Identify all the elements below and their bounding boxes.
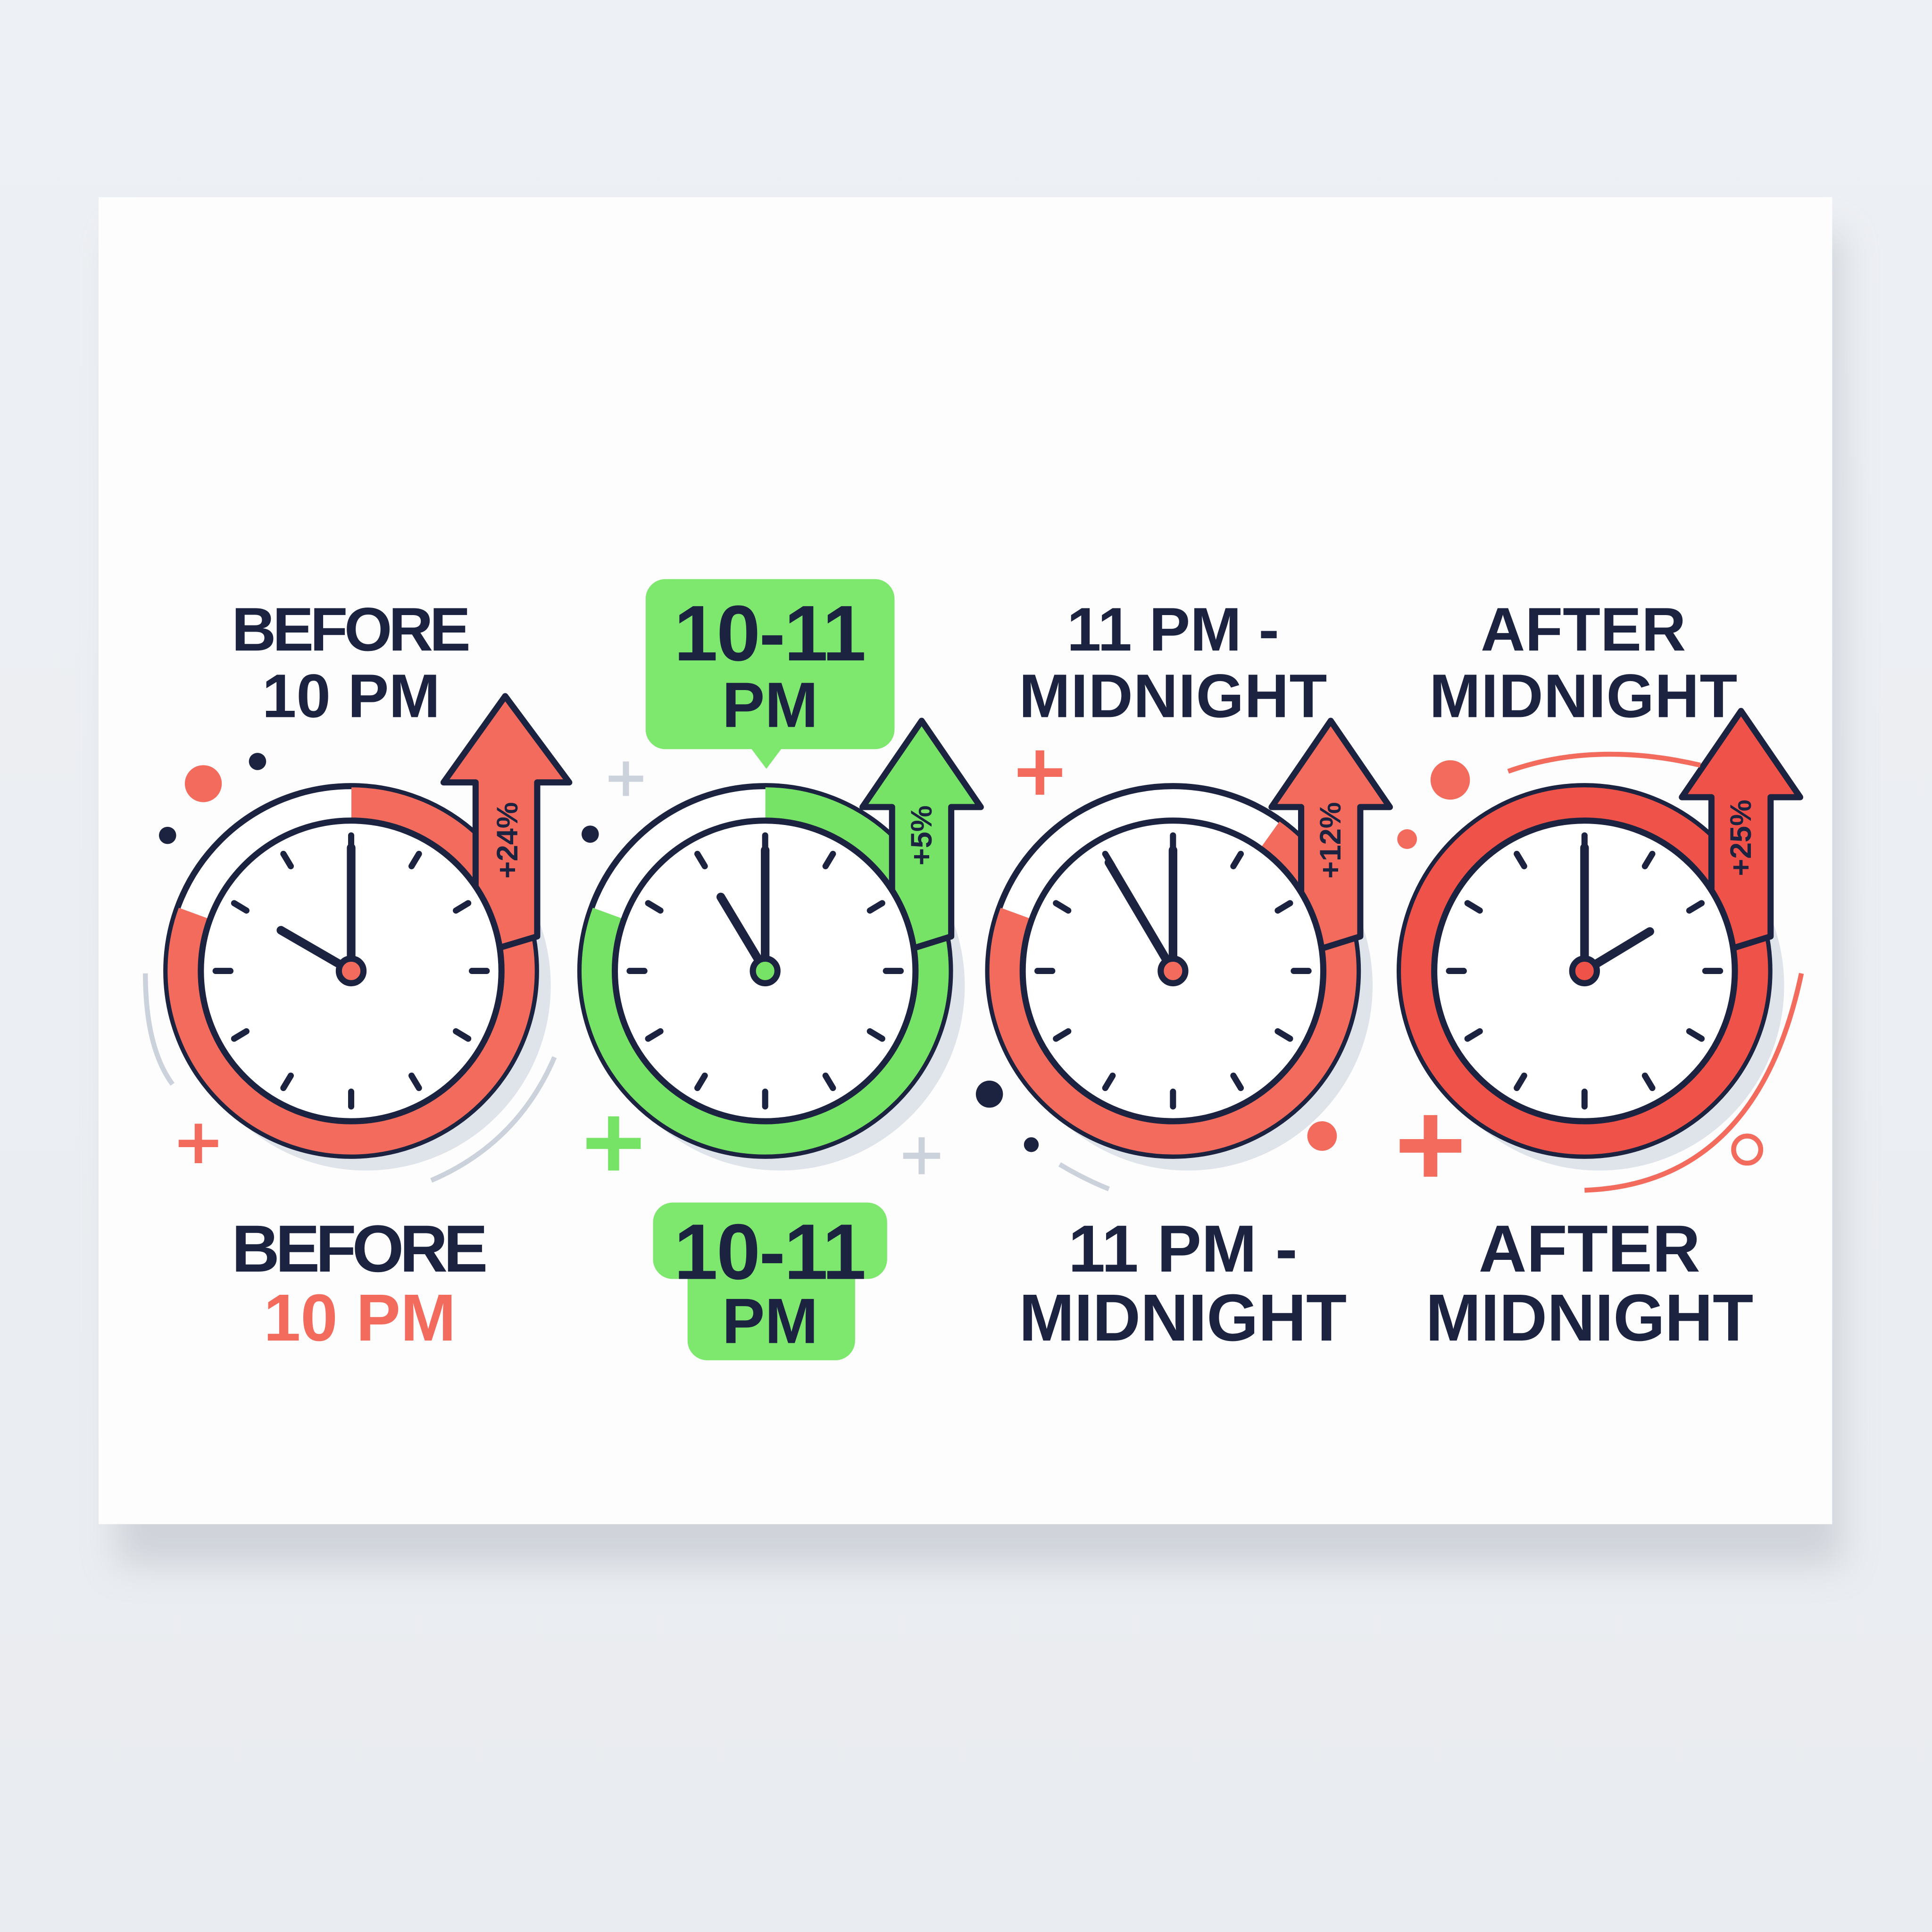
clock 3: 11 PM - midnight: [988, 721, 1390, 1171]
bottom label 1: BEFORE: [232, 1211, 488, 1286]
decorations: [145, 750, 1801, 1190]
bottom label 1: [232, 1211, 488, 1355]
top label 3: 11 PM -: [1067, 595, 1279, 664]
top label 2: green badge: PM: [722, 669, 818, 741]
card shadow: [117, 234, 1842, 1565]
clock 1: before 10 PM: +24%: [491, 802, 524, 879]
bottom label 4: AFTER: [1479, 1211, 1700, 1286]
top label 3: [1019, 595, 1327, 730]
top label 4: MIDNIGHT: [1429, 661, 1737, 730]
bottom label 4: MIDNIGHT: [1425, 1280, 1753, 1355]
bottom label 2: green badge: PM: [722, 1285, 818, 1357]
clock 4: after midnight: +25%: [1724, 799, 1757, 876]
panel: card: [99, 197, 1832, 1524]
top label 2: green badge: 10-11: [674, 590, 866, 677]
bottom label 3: 11 PM -: [1068, 1211, 1298, 1286]
top label 2: green badge: [646, 579, 894, 769]
clock 4: after midnight: [1400, 711, 1800, 1171]
clock 2: 10-11 PM: +5%: [905, 805, 938, 866]
top label 1: 10 PM: [262, 661, 440, 730]
bottom label 1: 10 PM: [264, 1280, 456, 1355]
bottom label 3: MIDNIGHT: [1019, 1280, 1347, 1355]
bottom label 3: [1019, 1211, 1347, 1355]
clock 1: before 10 PM: [167, 696, 569, 1171]
bottom label 4: [1425, 1211, 1753, 1355]
clock 2: 10-11 PM: [580, 721, 981, 1171]
top label 1: BEFORE: [232, 595, 471, 664]
top label 3: MIDNIGHT: [1019, 661, 1327, 730]
top label 4: AFTER: [1481, 595, 1686, 664]
bottom label 2: green badge: 10-11: [674, 1208, 866, 1296]
top label 4: [1429, 595, 1737, 730]
bottom label 2: green badge: [653, 1203, 887, 1360]
clock 3: 11 PM - midnight: +12%: [1314, 802, 1347, 879]
top label 1: [232, 595, 471, 730]
